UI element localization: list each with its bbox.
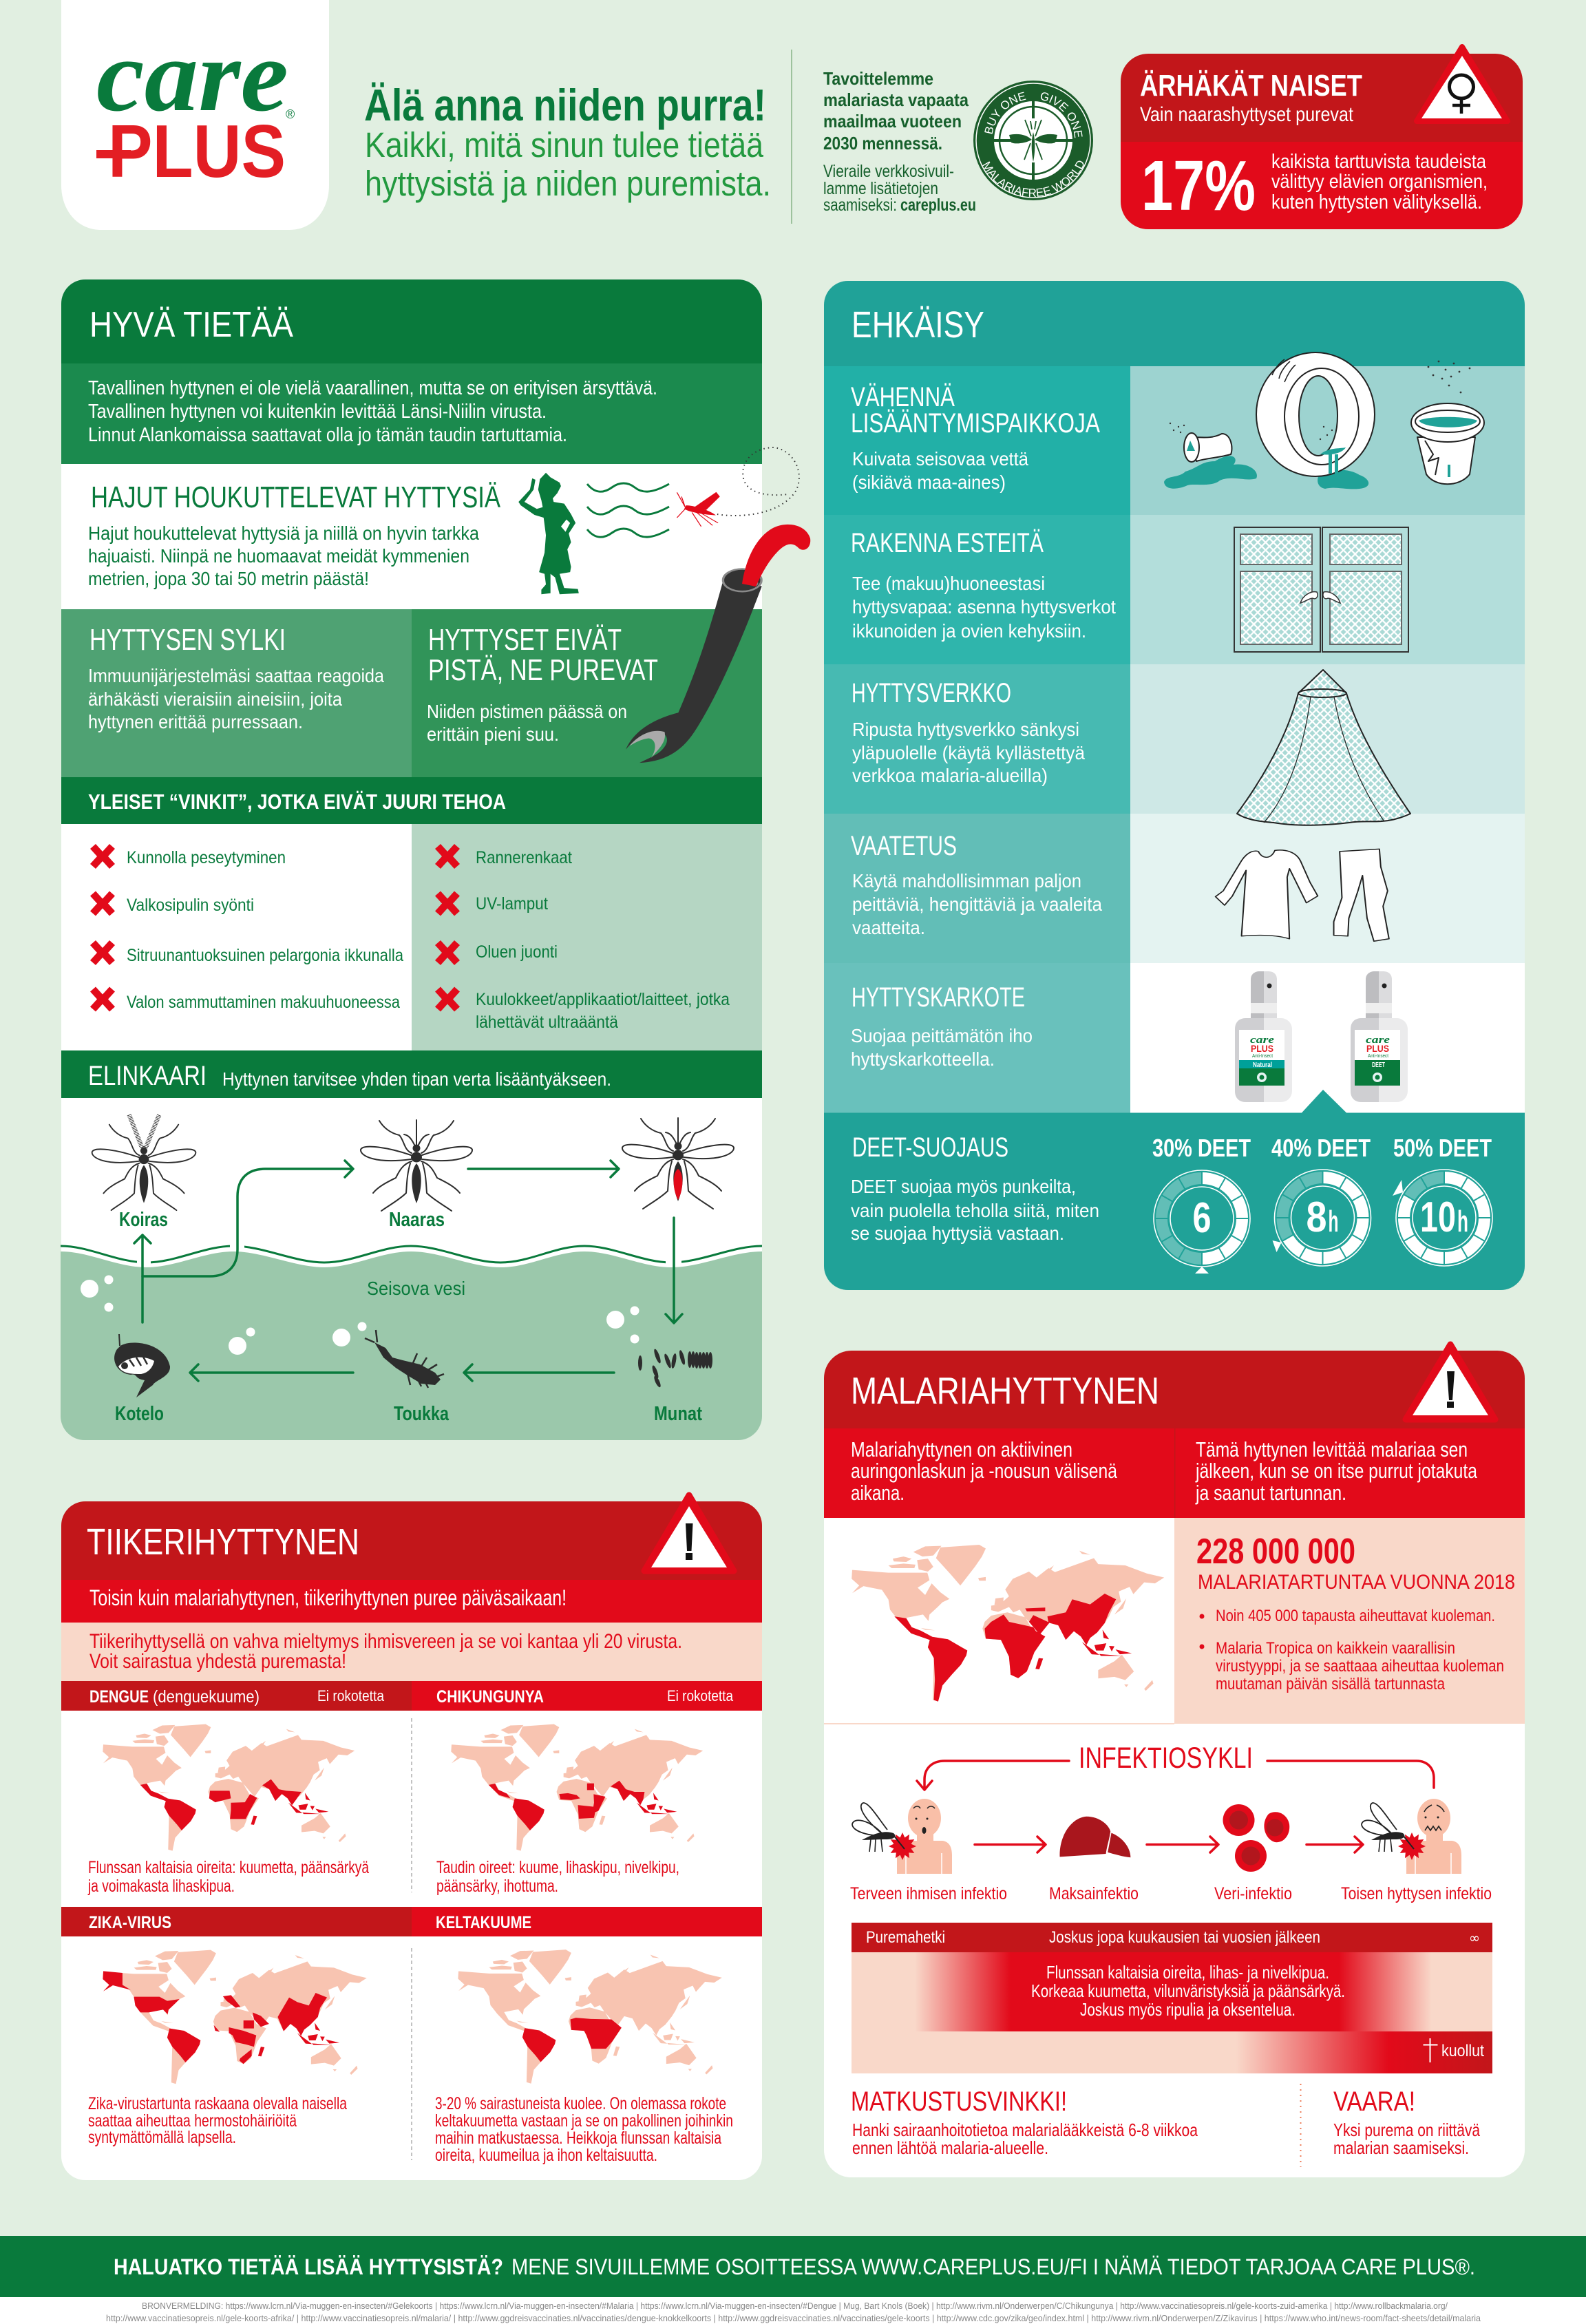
heading: elinkaari: ELINKAARI	[88, 1061, 207, 1091]
labels: cycle stages: Terveen ihmisen infektio	[850, 1884, 1007, 1903]
icon: bottle natural	[1235, 971, 1292, 1102]
row: deet-suojaus: vain puolella teholla siitä, miten	[851, 1200, 1099, 1221]
text block: malaria goal: lamme lisätietojen	[823, 179, 938, 198]
panel: hyvä tietää	[61, 279, 810, 824]
labels: cycle stages: Toisen hyttysen infektio	[1341, 1884, 1492, 1903]
heading: infektiosykli: INFEKTIOSYKLI	[1079, 1742, 1253, 1775]
icon: liver	[1059, 1817, 1130, 1857]
text block: hyttyset eivät pistä: HYTTYSET EIVÄT	[428, 623, 622, 657]
chart: symptom timeline: Korkeaa kuumetta, vilunväristyksiä ja päänsärkyä.	[1031, 1980, 1345, 2001]
chart: 30% DEET 6 hours: 30% DEET	[1152, 1134, 1251, 1162]
sub-panel: keltakuume: 3-20 % sairastuneista kuolee. On olemassa rokote	[435, 2094, 726, 2113]
statistic: 228 000 000: MALARIATARTUNTAA VUONNA 2018	[1198, 1571, 1515, 1594]
text: daytime biter: Toisin kuin malariahyttynen, tiikerihyttynen puree päiväsaikaan!	[89, 1585, 567, 1610]
sub-panel: keltakuume: KELTAKUUME	[436, 1913, 531, 1932]
sub-panel: dengue: DENGUE	[89, 1687, 149, 1707]
sources: http://www.vaccinatiesopreis.nl/gele-koorts-afrika/ | http://www.vaccinatiesopreis.nl/malaria/ | http://www.ggdreisvaccinaties.nl/vaccinaties/dengue-knokkelkoorts | http://www.ggdreisvaccinaties.nl/vaccinaties/gele-koorts | http://www.cdc.gov/zika/geo/index.html | http://www.rivm.nl/Onderwerpen/Z/Zikavirus | https://www.who.int/news-room/fact-sheets/detail/malaria	[106, 2313, 1481, 2323]
text block: hyttyset eivät pistä: erittäin pieni suu.	[427, 723, 559, 745]
arrow	[975, 1837, 1046, 1852]
footer banner	[0, 2236, 1586, 2297]
text block: hyttysen sylki: HYTTYSEN SYLKI	[89, 623, 286, 657]
sub-panel: zika: Zika-virustartunta raskaana olevalla naisella	[88, 2094, 347, 2113]
text block: hyttyset eivät pistä	[427, 623, 658, 745]
sources	[0, 2297, 1586, 2324]
text: active time: Malariahyttynen on aktiivinen	[851, 1437, 1072, 1461]
map: dengue	[103, 1724, 355, 1851]
dotted flight path	[717, 447, 799, 516]
row: rakenna esteitä	[851, 528, 1116, 642]
badge: buy one give one: GIVE ONE	[1041, 92, 1083, 138]
label: kotelo: Kotelo	[115, 1403, 164, 1425]
text block: intro: Tavallinen hyttynen voi kuitenkin levittää Länsi-Niilin virusta.	[88, 401, 547, 423]
text block: malaria goal	[823, 68, 976, 215]
chart: 30% DEET 6 hours	[1152, 1134, 1251, 1274]
chart: 40% DEET 8 hours: h	[1329, 1205, 1338, 1238]
icon: bottle deet	[1351, 971, 1408, 1102]
row: deet-suojaus	[851, 1132, 1099, 1244]
list: right tips	[435, 844, 730, 1032]
text block: hyttysen sylki: ärhäkästi vieraisiin aineisiin, joita	[88, 688, 342, 710]
row: rakenna esteitä: ikkunoiden ja ovien kehyksiin.	[852, 620, 1086, 642]
list: left tips: Kunnolla peseytyminen	[127, 848, 286, 867]
text block: hyttyset eivät pistä: PISTÄ, NE PUREVAT	[428, 653, 658, 687]
chart: 50% DEET 10 hours: 10	[1420, 1194, 1456, 1241]
icon: bottle deet: care	[1366, 1035, 1390, 1046]
chart: 50% DEET 10 hours: h	[1457, 1205, 1468, 1238]
heading: malariahyttynen: MALARIAHYTTYNEN	[851, 1369, 1159, 1412]
heading: ehkäisy: EHKÄISY	[852, 304, 984, 346]
row: hyttyskarkote: Suojaa peittämätön iho	[851, 1025, 1033, 1046]
label: naaras: Naaras	[389, 1209, 445, 1231]
sub-panel: dengue: ja voimakasta lihaskipua.	[87, 1877, 235, 1896]
text block: malaria goal: 2030 mennessä.	[823, 133, 942, 154]
map: malaria	[852, 1545, 1164, 1702]
panel: ärhäkät naiset: välittyy elävien organismien,	[1271, 171, 1488, 193]
chart: 50% DEET 10 hours	[1393, 1134, 1492, 1266]
heading: yleiset vinkit: YLEISET “VINKIT”, JOTKA EIVÄT JUURI TEHOA	[88, 790, 506, 814]
standing water	[61, 1251, 762, 1440]
row: vaatetus: vaatteita.	[852, 917, 925, 938]
sub-panel: keltakuume: keltakuumetta vastaan ja se on pakollinen joihinkin	[435, 2111, 733, 2131]
row: hyttysverkko	[852, 678, 1085, 786]
list: right tips: UV-lamput	[476, 894, 548, 913]
text block: hyttysen sylki: Immuunijärjestelmäsi saattaa reagoida	[88, 665, 384, 686]
panel: ärhäkät naiset: ÄRHÄKÄT NAISET	[1140, 69, 1362, 103]
text block: hyttysen sylki: hyttynen erittää purressaan.	[88, 711, 303, 732]
icon: tyre with water	[1256, 352, 1375, 489]
chart: symptom timeline: Puremahetki	[866, 1928, 945, 1947]
row: hyttysverkko: yläpuolelle (käytä kyllästettyä	[852, 742, 1085, 763]
map: keltakuume	[458, 1950, 722, 2084]
panel: ärhäkät naiset	[1121, 54, 1523, 229]
text block: matkustusvinkki: MATKUSTUSVINKKI!	[851, 2087, 1067, 2117]
list: right tips: Oluen juonti	[476, 942, 558, 962]
text block: vaara: Yksi purema on riittävä	[1333, 2120, 1480, 2140]
row: vaatetus: VAATETUS	[851, 831, 957, 861]
icon: bottle deet: Anti-Insect	[1368, 1054, 1388, 1059]
text block: matkustusvinkki: ennen lähtöä malaria-alueelle.	[852, 2137, 1048, 2158]
chart: symptom timeline: ∞	[1469, 1930, 1480, 1946]
list: right tips: Kuulokkeet/applikaatiot/laitteet, jotka	[476, 990, 730, 1009]
row: vähennä lisääntymispaikkoja: Kuivata seisovaa vettä	[852, 448, 1028, 469]
icon: pupa	[114, 1334, 170, 1397]
badge: buy one give one	[973, 81, 1093, 200]
text: how it spreads: ja saanut tartunnan.	[1195, 1481, 1346, 1505]
list: left tips: Sitruunantuoksuinen pelargonia ikkunalla	[127, 946, 403, 965]
chart: symptom timeline	[852, 1923, 1492, 2073]
text block: intro	[88, 377, 657, 446]
chart: 40% DEET 8 hours	[1271, 1134, 1371, 1266]
arrow	[1147, 1837, 1218, 1852]
icon: healthy person bitten	[852, 1799, 952, 1874]
text block: hajut	[88, 480, 501, 589]
list: malaria facts: virustyyppi, ja se saattaaa aiheuttaa kuoleman	[1216, 1657, 1504, 1676]
row: deet-suojaus: DEET-SUOJAUS	[852, 1132, 1008, 1163]
row: hyttysverkko: Ripusta hyttysverkko sänkysi	[852, 719, 1079, 740]
icon: blood-fed mosquito	[622, 1118, 734, 1209]
map: zika	[103, 1950, 367, 2084]
sub-panel: keltakuume	[435, 1913, 733, 2165]
row: vaatetus: peittäviä, hengittäviä ja vaaleita	[852, 894, 1102, 915]
sources: BRONVERMELDING: https://www.lcrn.nl/Via-muggen-en-insecten/#Gelekoorts | https://www.lcrn.nl/Via-muggen-en-insecten/#Malaria | https://www.lcrn.nl/Via-muggen-en-insecten/#Dengue | Mug, Bart Knols (Boek) | http://www.rivm.nl/Onderwerpen/C/Chikungunya | http://www.vaccinatiesopreis.nl/gele-koorts-zuid-amerika | http://www.rollbackmalaria.org/	[142, 2301, 1448, 2311]
text block: hyttysen sylki	[88, 623, 384, 732]
text: active time: aikana.	[851, 1481, 905, 1505]
sub-panel: dengue	[87, 1687, 385, 1896]
text block: malaria goal: saamiseksi:	[823, 196, 897, 215]
text: human blood preference	[89, 1630, 682, 1673]
row: vaatetus: Käytä mahdollisimman paljon	[852, 870, 1081, 891]
icon: male mosquito	[92, 1115, 195, 1210]
row: vähennä lisääntymispaikkoja: LISÄÄNTYMISPAIKKOJA	[851, 408, 1100, 439]
list: malaria facts: muutaman päivän sisällä tartunnasta	[1216, 1675, 1446, 1693]
sub-panel: zika: syntymättömällä lapsella.	[88, 2128, 236, 2147]
text block: intro: Tavallinen hyttynen ei ole vielä vaarallinen, mutta se on erityisen ärsyttävä.	[88, 377, 657, 399]
icon: mosquito bed net	[1237, 670, 1410, 825]
logo: Care Plus: care	[96, 19, 288, 133]
label: seisova vesi: Seisova vesi	[367, 1278, 465, 1299]
text: how it spreads: Tämä hyttynen levittää malariaa sen	[1196, 1437, 1468, 1461]
icon: bottle natural: Natural	[1253, 1061, 1272, 1069]
panel: malariahyttynen	[824, 1344, 1525, 2177]
text block: hyttyset eivät pistä: Niiden pistimen päässä on	[427, 701, 627, 722]
sub-panel: keltakuume: maihin matkustaessa. Heikkoja flunssan kaltaisia	[435, 2128, 721, 2148]
icon: bottle natural: PLUS	[1251, 1043, 1273, 1054]
row: rakenna esteitä: hyttysvapaa: asenna hyttysverkot	[852, 596, 1116, 617]
logo: Care Plus	[61, 0, 329, 230]
footer banner: MENE SIVUILLEMME OSOITTEESSA WWW.CAREPLUS.EU/FI I NÄMÄ TIEDOT TARJOAA CARE PLUS®.	[511, 2254, 1475, 2279]
sub-panel: dengue: Flunssan kaltaisia oireita: kuumetta, päänsärkyä	[88, 1858, 369, 1877]
chart: symptom timeline: Flunssan kaltaisia oireita, lihas- ja nivelkipua.	[1046, 1962, 1329, 1983]
icon: tipped cup with puddle	[1164, 433, 1257, 489]
icon: bottle natural: care	[1250, 1035, 1274, 1046]
badge: buy one give one: MALARIAFREE WORLD	[982, 161, 1083, 197]
chart: symptom timeline: Joskus jopa kuukausien tai vuosien jälkeen	[1049, 1928, 1320, 1947]
text block: hajut: Hajut houkuttelevat hyttysiä ja niillä on hyvin tarkka	[88, 522, 479, 544]
text: how it spreads: jälkeen, kun se on itse purrut jotakuta	[1195, 1459, 1478, 1483]
panel: ärhäkät naiset: 17%	[1141, 146, 1256, 225]
row: vähennä lisääntymispaikkoja	[851, 382, 1100, 493]
sub-panel: chikungunya: Ei rokotetta	[667, 1687, 734, 1704]
heading: tiikerihyttynen: TIIKERIHYTTYNEN	[87, 1521, 359, 1563]
text block: matkustusvinkki	[851, 2087, 1198, 2158]
panel: ärhäkät naiset: kuten hyttysten välityksellä.	[1271, 191, 1482, 213]
footer banner: HALUATKO TIETÄÄ LISÄÄ HYTTYSISTÄ?	[114, 2254, 503, 2279]
heading: elinkaari	[88, 1061, 611, 1091]
title: Älä anna niiden purra!	[364, 80, 766, 130]
row: hyttyskarkote: HYTTYSKARKOTE	[852, 982, 1025, 1013]
sub-panel: zika: ZIKA-VIRUS	[89, 1913, 171, 1932]
text block: intro: Linnut Alankomaissa saattavat olla jo tämän taudin tartuttamia.	[88, 424, 567, 446]
row: hyttysverkko: verkkoa malaria-alueilla)	[852, 765, 1048, 786]
row: vähennä lisääntymispaikkoja: VÄHENNÄ	[851, 382, 955, 412]
list: malaria facts	[1199, 1607, 1504, 1693]
text block: vaara	[1333, 2087, 1480, 2158]
text block: malaria goal: Tavoittelemme	[823, 68, 933, 89]
list: right tips: Rannerenkaat	[476, 848, 572, 867]
bubbles	[81, 1275, 639, 1355]
icon: infected person bitten	[1362, 1799, 1461, 1874]
icon: long-sleeved shirt and trousers	[1216, 849, 1389, 941]
sub-panel: keltakuume: oireita, kuumeilua ja ihon keltaisuutta.	[435, 2146, 657, 2165]
row: deet-suojaus: DEET suojaa myös punkeilta,	[851, 1176, 1076, 1197]
text: human blood preference: Tiikerihyttysellä on vahva mieltymys ihmisvereen ja se voi kantaa yli 20 virusta.	[89, 1630, 682, 1653]
panel: ärhäkät naiset: Vain naarashyttyset purevat	[1140, 103, 1354, 126]
text block: malaria goal: maailmaa vuoteen	[823, 111, 962, 131]
statistic: 228 000 000	[1196, 1532, 1515, 1594]
text block: malaria goal: Vieraile verkkosivuil-	[823, 162, 954, 181]
sub-panel: dengue: Ei rokotetta	[317, 1687, 385, 1704]
list: left tips	[90, 844, 403, 1012]
icon: bottle deet: DEET	[1372, 1061, 1385, 1069]
icon: bottle natural: Anti-Insect	[1252, 1054, 1273, 1059]
text: how it spreads	[1195, 1437, 1478, 1505]
row: hyttyskarkote	[851, 982, 1033, 1070]
arrows: life cycle	[134, 1161, 682, 1381]
heading: hyvä tietää: HYVÄ TIETÄÄ	[89, 305, 293, 345]
labels: cycle stages: Maksainfektio	[1049, 1884, 1139, 1903]
chart: 50% DEET 10 hours: 50% DEET	[1393, 1134, 1492, 1162]
chart: 40% DEET 8 hours: 8	[1307, 1194, 1327, 1241]
text: human blood preference: Voit sairastua yhdestä puremasta!	[89, 1650, 346, 1673]
list: malaria facts: Malaria Tropica on kaikkein vaarallisin	[1216, 1639, 1455, 1658]
chart: 30% DEET 6 hours: 6	[1192, 1194, 1212, 1242]
chart: 40% DEET 8 hours: 40% DEET	[1271, 1134, 1371, 1162]
chart: symptom timeline: kuollut	[1441, 2042, 1484, 2060]
label: koiras: Koiras	[119, 1209, 168, 1231]
sub-panel: chikungunya	[436, 1687, 734, 1896]
list: left tips: Valon sammuttaminen makuuhuoneessa	[127, 993, 400, 1012]
sub-panel: chikungunya: CHIKUNGUNYA	[436, 1687, 544, 1707]
icon: red mosquito	[677, 492, 720, 527]
sub-panel: chikungunya: päänsärky, ihottuma.	[436, 1877, 558, 1896]
icon: warning triangle	[1406, 1344, 1495, 1419]
row: vähennä lisääntymispaikkoja: (sikiävä maa-aines)	[852, 472, 1006, 493]
icon: eggs	[638, 1349, 712, 1388]
icon: female warning triangle	[1417, 47, 1508, 121]
text block: hajut: HAJUT HOUKUTTELEVAT HYTTYSIÄ	[91, 480, 501, 514]
text block: malaria goal: careplus.eu	[900, 196, 976, 215]
panel: ineffective tips	[61, 824, 762, 1050]
row: deet-suojaus: se suojaa hyttysiä vastaan.	[851, 1223, 1064, 1244]
label: toukka: Toukka	[394, 1403, 450, 1425]
panel: tiikerihyttynen	[61, 1495, 762, 2180]
chart: symptom timeline: Joskus myös ripulia ja oksentelua.	[1080, 1999, 1296, 2020]
panel: elinkaari life cycle	[61, 1050, 762, 1440]
icon: person smelling	[518, 473, 579, 594]
decorative mosquito swarm dots	[1170, 361, 1470, 440]
labels: cycle stages: Veri-infektio	[1214, 1884, 1292, 1903]
text block: vaara: VAARA!	[1333, 2087, 1415, 2117]
arrow	[1307, 1837, 1363, 1852]
sub-panel: zika	[88, 1913, 367, 2147]
text block: hajut: metrien, jopa 30 tai 50 metrin päästä!	[88, 568, 369, 589]
logo: Care Plus: PLUS	[108, 109, 286, 193]
row: rakenna esteitä: RAKENNA ESTEITÄ	[851, 528, 1044, 558]
map: chikungunya	[451, 1724, 703, 1851]
arrow: cycle return	[917, 1761, 1434, 1790]
icon: warning triangle	[644, 1495, 734, 1571]
labels: cycle stages	[850, 1884, 1492, 1903]
icon: window with net	[1234, 527, 1408, 652]
panel: ehkäisy	[824, 281, 1525, 1290]
icon: larva	[365, 1330, 444, 1388]
text block: vaara: malarian saamiseksi.	[1333, 2137, 1469, 2158]
row: rakenna esteitä: Tee (makuu)huoneestasi	[852, 573, 1045, 594]
icon: mosquito proboscis	[626, 525, 810, 763]
title: Kaikki, mitä sinun tulee tietää	[365, 125, 764, 165]
text: active time	[851, 1437, 1118, 1505]
heading: elinkaari: Hyttynen tarvitsee yhden tipan verta lisääntyäkseen.	[222, 1068, 611, 1090]
sub-panel: dengue: (denguekuume)	[153, 1687, 260, 1707]
row: hyttysverkko: HYTTYSVERKKO	[852, 678, 1011, 708]
row: vaatetus	[851, 831, 1102, 938]
title	[364, 80, 771, 203]
list: malaria facts: Noin 405 000 tapausta aiheuttavat kuoleman.	[1216, 1607, 1495, 1625]
text: active time: auringonlaskun ja -nousun välisenä	[851, 1459, 1118, 1483]
sub-panel: zika: saattaa aiheuttaa hermostohäiriöitä	[88, 2111, 297, 2131]
panel: ärhäkät naiset: kaikista tarttuvista taudeista	[1271, 151, 1487, 173]
list: right tips: lähettävät ultraääntä	[476, 1013, 618, 1032]
icon: bottle deet: PLUS	[1366, 1043, 1389, 1054]
logo: Care Plus: ®	[286, 107, 295, 121]
label: munat: Munat	[654, 1403, 702, 1425]
row: hyttyskarkote: hyttyskarkotteella.	[851, 1048, 995, 1070]
icon: scent waves	[587, 483, 669, 537]
icon: female mosquito	[361, 1120, 472, 1211]
list: left tips: Valkosipulin syönti	[127, 896, 254, 915]
badge: buy one give one: BUY ONE	[984, 92, 1026, 134]
sub-panel: chikungunya: Taudin oireet: kuume, lihaskipu, nivelkipu,	[436, 1858, 679, 1877]
statistic: 228 000 000: 228 000 000	[1196, 1532, 1355, 1572]
icon: cracked pot	[1411, 403, 1484, 484]
text block: matkustusvinkki: Hanki sairaanhoitotietoa malarialääkkeistä 6-8 viikkoa	[852, 2120, 1198, 2140]
title: hyttysistä ja niiden puremista.	[365, 164, 771, 203]
icon: blood cells	[1223, 1804, 1289, 1872]
text block: hajut: hajuaisti. Niinpä ne huomaavat meidät kymmenien	[88, 545, 469, 567]
text block: malaria goal: malariasta vapaata	[823, 89, 969, 110]
